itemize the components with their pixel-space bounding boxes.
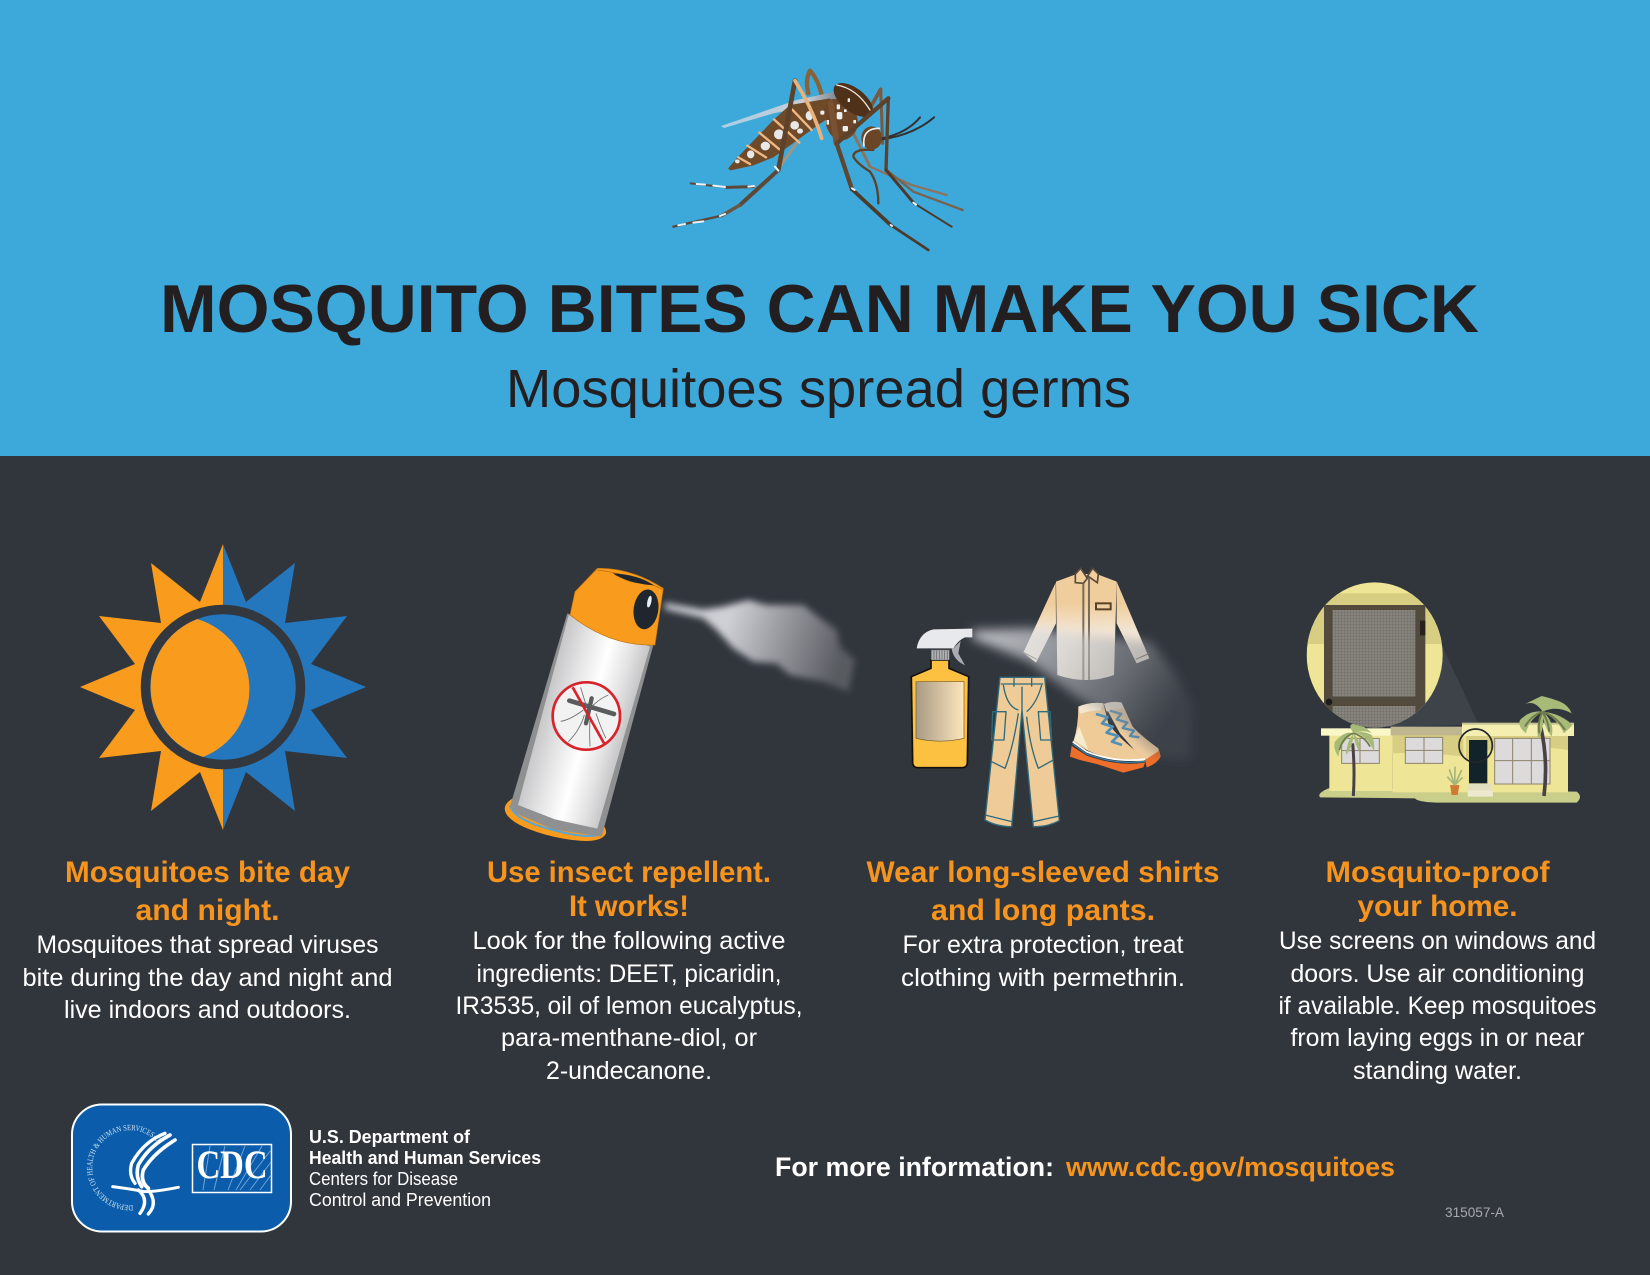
- column 2 text: [456, 856, 802, 1085]
- ring: [146, 610, 300, 764]
- more information line: [775, 1152, 1395, 1182]
- sun half: [80, 544, 223, 830]
- heading: bite day and night: [65, 856, 350, 927]
- icon: sun and moon: [80, 544, 366, 830]
- body: repellent: Look for the following active: [472, 927, 786, 955]
- title: MOSQUITO BITES CAN MAKE YOU SICK: [160, 271, 1479, 347]
- wing: [721, 91, 844, 128]
- icon: clothing and repellent bottle: [911, 568, 1192, 827]
- body: bite day and night: live indoors and outdoors.: [64, 996, 351, 1024]
- cap top slot: [613, 573, 654, 585]
- windows: [1342, 737, 1550, 784]
- moon half: [223, 544, 366, 830]
- no-mosquito label: [553, 682, 620, 750]
- body: clothing: For extra protection, treat: [902, 931, 1184, 959]
- heading: repellent: [487, 856, 771, 923]
- logo: HHS and CDC badge: [71, 1104, 292, 1232]
- HHS eagle: [113, 1133, 178, 1214]
- can body: [518, 615, 650, 829]
- potted plant: [1447, 767, 1463, 795]
- body: repellent: 2-undecanone.: [546, 1057, 712, 1085]
- heading: bite day and night: Mosquitoes bite day: [65, 856, 350, 889]
- base rim: [505, 798, 606, 841]
- mosquito illustration: [673, 71, 963, 250]
- abdomen: [728, 98, 831, 170]
- far legs: [780, 71, 963, 210]
- column 1 text: [22, 856, 392, 1024]
- pants: [985, 677, 1059, 827]
- front legs: [673, 81, 952, 250]
- CDC box: CDC: [196, 1142, 268, 1187]
- head, antennae, proboscis: [853, 117, 934, 203]
- icon: repellent spray can: [505, 568, 855, 841]
- heading: clothing: and long pants.: [931, 894, 1155, 927]
- body: home: [1278, 927, 1596, 1085]
- body: home: from laying eggs in or near: [1290, 1024, 1584, 1052]
- header band: [0, 0, 1650, 456]
- door and steps: [1459, 729, 1493, 797]
- body: bite day and night: Mosquitoes that spread viruses: [36, 931, 378, 959]
- cap: [570, 568, 663, 645]
- heading: clothing: [866, 856, 1220, 927]
- subtitle: Mosquitoes spread germs: [506, 359, 1131, 419]
- yard: [1319, 788, 1580, 803]
- body: home: if available. Keep mosquitoes: [1278, 992, 1596, 1020]
- thorax: [820, 76, 879, 140]
- body: home: doors. Use air conditioning: [1290, 960, 1584, 988]
- publication code: 315057-A: [1445, 1204, 1505, 1220]
- spray bottle: [911, 629, 972, 768]
- column 3 text: [866, 856, 1220, 992]
- heading: home: your home.: [1358, 890, 1518, 923]
- body: clothing: [901, 931, 1185, 992]
- column 4 text: [1278, 856, 1596, 1085]
- body: bite day and night: bite during the day and night and: [22, 964, 392, 992]
- HHS seal text: DEPARTMENT OF HEALTH & HUMAN SERVICES·USA: [86, 1124, 161, 1210]
- heading: home: [1326, 856, 1551, 923]
- boots: [1070, 702, 1161, 773]
- heading: repellent: Use insect repellent.: [487, 856, 771, 889]
- icon: house with window screen: [1307, 580, 1580, 803]
- more information line: For more information:: [775, 1152, 1054, 1182]
- body: repellent: [456, 927, 802, 1085]
- magnifier lens: [1307, 580, 1443, 730]
- body: repellent: ingredients: DEET, picaridin,: [476, 960, 782, 988]
- spray plume: [665, 600, 855, 692]
- heading: repellent: It works!: [569, 890, 689, 923]
- agency name: Control and Prevention: [309, 1190, 491, 1210]
- magnifier cone: [1375, 627, 1478, 727]
- nozzle: [631, 588, 661, 631]
- ring interior: [149, 613, 297, 761]
- dark body panel: [0, 456, 1650, 1275]
- more information line: www.cdc.gov/mosquitoes: [1065, 1152, 1395, 1182]
- body: home: standing water.: [1353, 1057, 1522, 1085]
- house walls: [1321, 723, 1574, 792]
- body: bite day and night: [22, 931, 392, 1024]
- shirt: [1023, 568, 1149, 680]
- can edge: [510, 613, 653, 837]
- heading: home: Mosquito-proof: [1326, 856, 1551, 889]
- agency name: Health and Human Services: [309, 1148, 541, 1168]
- body: repellent: para-menthane-diol, or: [501, 1024, 757, 1052]
- orange crescent: [151, 619, 249, 757]
- heading: bite day and night: and night.: [136, 894, 280, 927]
- left palm: [1334, 724, 1374, 796]
- agency name: [309, 1127, 541, 1210]
- body: home: Use screens on windows and: [1279, 927, 1596, 955]
- agency name: U.S. Department of: [309, 1127, 471, 1147]
- abdomen bands and spots: [735, 109, 813, 164]
- spray mist: [972, 628, 1192, 760]
- right palm: [1519, 696, 1573, 796]
- cap rim: [597, 570, 663, 589]
- agency name: Centers for Disease: [309, 1169, 458, 1189]
- body: repellent: IR3535, oil of lemon eucalyptus,: [456, 992, 802, 1020]
- heading: clothing: Wear long-sleeved shirts: [866, 856, 1220, 889]
- body: clothing: clothing with permethrin.: [901, 964, 1185, 992]
